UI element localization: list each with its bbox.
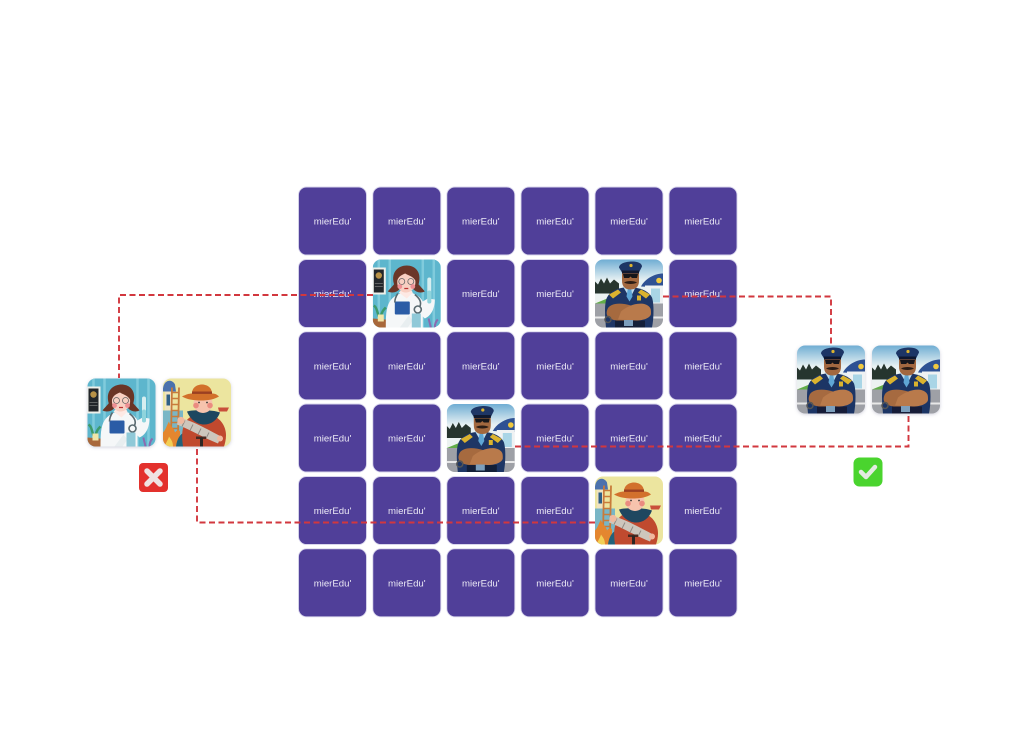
card row 6: mierEdu' (388, 578, 426, 589)
card row 4: mierEdu' (314, 434, 351, 444)
flipped card: police officer on board, row 2 (595, 260, 663, 328)
card row 2 (298, 260, 737, 328)
card row 5 (298, 476, 737, 544)
card row 1: mierEdu' (462, 216, 500, 228)
arrow: police card to match pair, upper (663, 296, 831, 345)
card row 4: mierEdu' (610, 434, 648, 444)
card row 4 (298, 404, 737, 472)
card row 4: mierEdu' (388, 434, 426, 444)
icon: red cross (139, 463, 168, 492)
card row 6: mierEdu' (536, 578, 574, 589)
card row 5: mierEdu' (314, 506, 351, 517)
card row 5: mierEdu' (536, 506, 574, 517)
card row 5: mierEdu' (684, 506, 722, 517)
arrow: firefighter card to mismatch pair (197, 447, 595, 522)
card row 5: mierEdu' (462, 506, 500, 517)
card row 6: mierEdu' (462, 578, 500, 589)
game board: 6 by 6 card grid (298, 187, 737, 617)
card row 6: mierEdu' (314, 578, 351, 589)
card row 3: mierEdu' (462, 361, 500, 372)
card row 1: mierEdu' (684, 216, 722, 228)
card row 3: mierEdu' (536, 361, 574, 372)
card row 2: mierEdu' (462, 289, 500, 300)
card row 2: mierEdu' (314, 289, 351, 300)
card row 6: mierEdu' (610, 578, 648, 589)
arrow: doctor card to mismatch pair (119, 295, 373, 378)
card row 1: mierEdu' (536, 216, 574, 228)
card row 2: mierEdu' (684, 289, 722, 300)
arrow: police card to match pair, lower (515, 414, 908, 446)
card row 3: mierEdu' (684, 361, 722, 372)
card row 3: mierEdu' (388, 361, 426, 372)
card row 1: mierEdu' (610, 216, 648, 228)
icon: green check (854, 458, 882, 486)
card row 2: mierEdu' (536, 289, 574, 300)
card row 4: mierEdu' (536, 434, 574, 444)
card row 3: mierEdu' (314, 361, 351, 372)
card row 6 (298, 549, 737, 617)
card row 1 (298, 187, 737, 255)
card row 4: mierEdu' (684, 434, 722, 444)
card row 6: mierEdu' (684, 578, 722, 589)
card row 1: mierEdu' (314, 216, 351, 228)
card row 3: mierEdu' (610, 361, 648, 372)
flipped card: firefighter on board (595, 476, 663, 544)
flipped card: doctor on board (373, 260, 441, 328)
card row 1: mierEdu' (388, 216, 426, 228)
flipped card: police officer on board, row 4 (447, 404, 515, 472)
card row 5: mierEdu' (388, 506, 426, 517)
card row 3 (298, 332, 737, 400)
mismatch pair: doctor and firefighter (88, 378, 231, 446)
match pair: two police officers (797, 346, 940, 414)
